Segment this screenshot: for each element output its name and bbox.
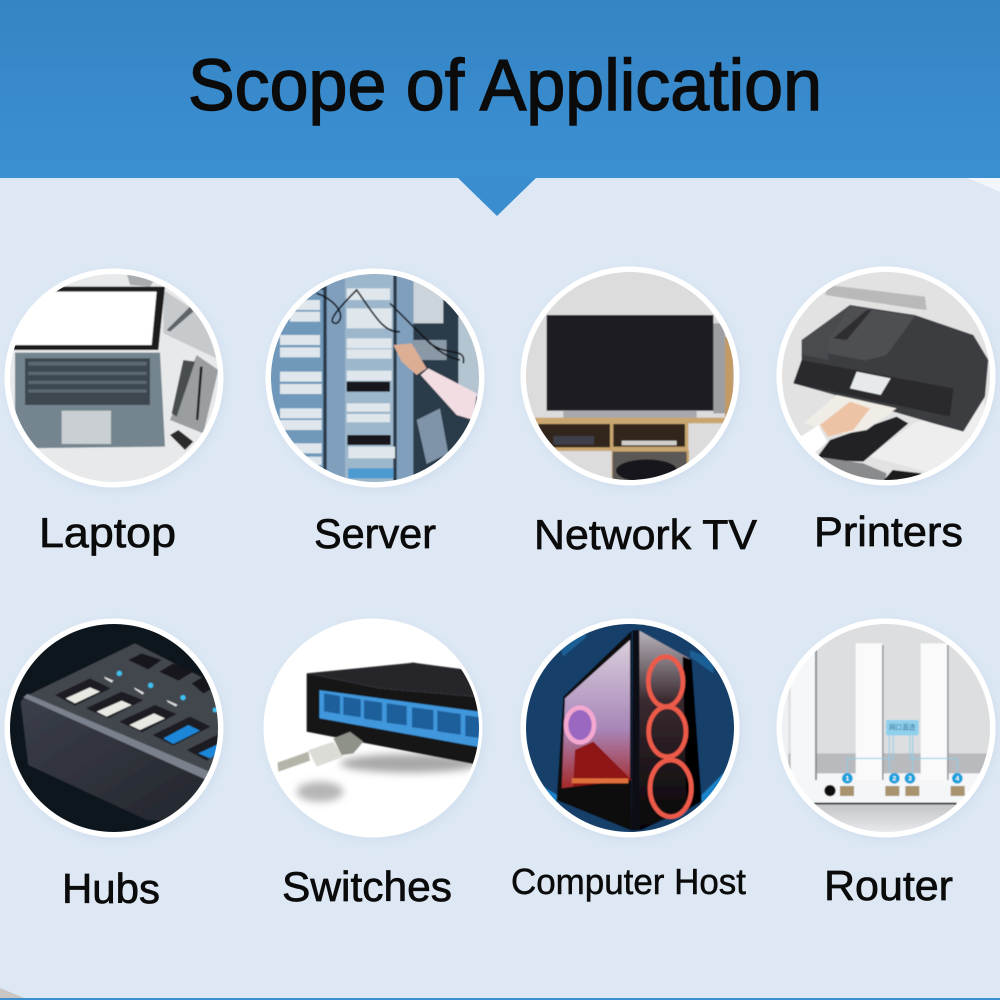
label: network tv: Network TV xyxy=(534,511,757,558)
bottom edge strip xyxy=(0,998,1000,1000)
panel: router: 4 xyxy=(955,776,959,783)
label: hubs: Hubs xyxy=(62,865,160,912)
label: printers: Printers xyxy=(814,508,963,555)
panel: printers xyxy=(773,266,1000,488)
panel: switches xyxy=(264,618,484,840)
label: laptop: Laptop xyxy=(39,509,176,556)
panel: network tv xyxy=(520,266,743,488)
panel: hubs xyxy=(3,618,227,840)
panel: router xyxy=(773,618,1000,840)
panel: router: 1 xyxy=(845,776,849,783)
panel: router: 2 xyxy=(892,776,896,783)
panel: router: 网口直连 xyxy=(889,723,916,732)
title: Scope of Application xyxy=(188,46,822,126)
label: switches: Switches xyxy=(282,863,452,910)
panel: server xyxy=(263,268,490,490)
panel bottom-left corner shade xyxy=(0,988,24,998)
panel: laptop xyxy=(0,260,227,493)
label: computer host: Computer Host xyxy=(511,861,746,902)
header band xyxy=(0,0,1000,178)
header pointer arrow xyxy=(457,177,537,216)
panel: router: 3 xyxy=(908,776,912,783)
label: server: Server xyxy=(314,510,436,557)
label: router: Router xyxy=(824,862,953,909)
panel: computer host xyxy=(520,618,743,840)
panel top-right corner highlight xyxy=(968,178,1000,192)
